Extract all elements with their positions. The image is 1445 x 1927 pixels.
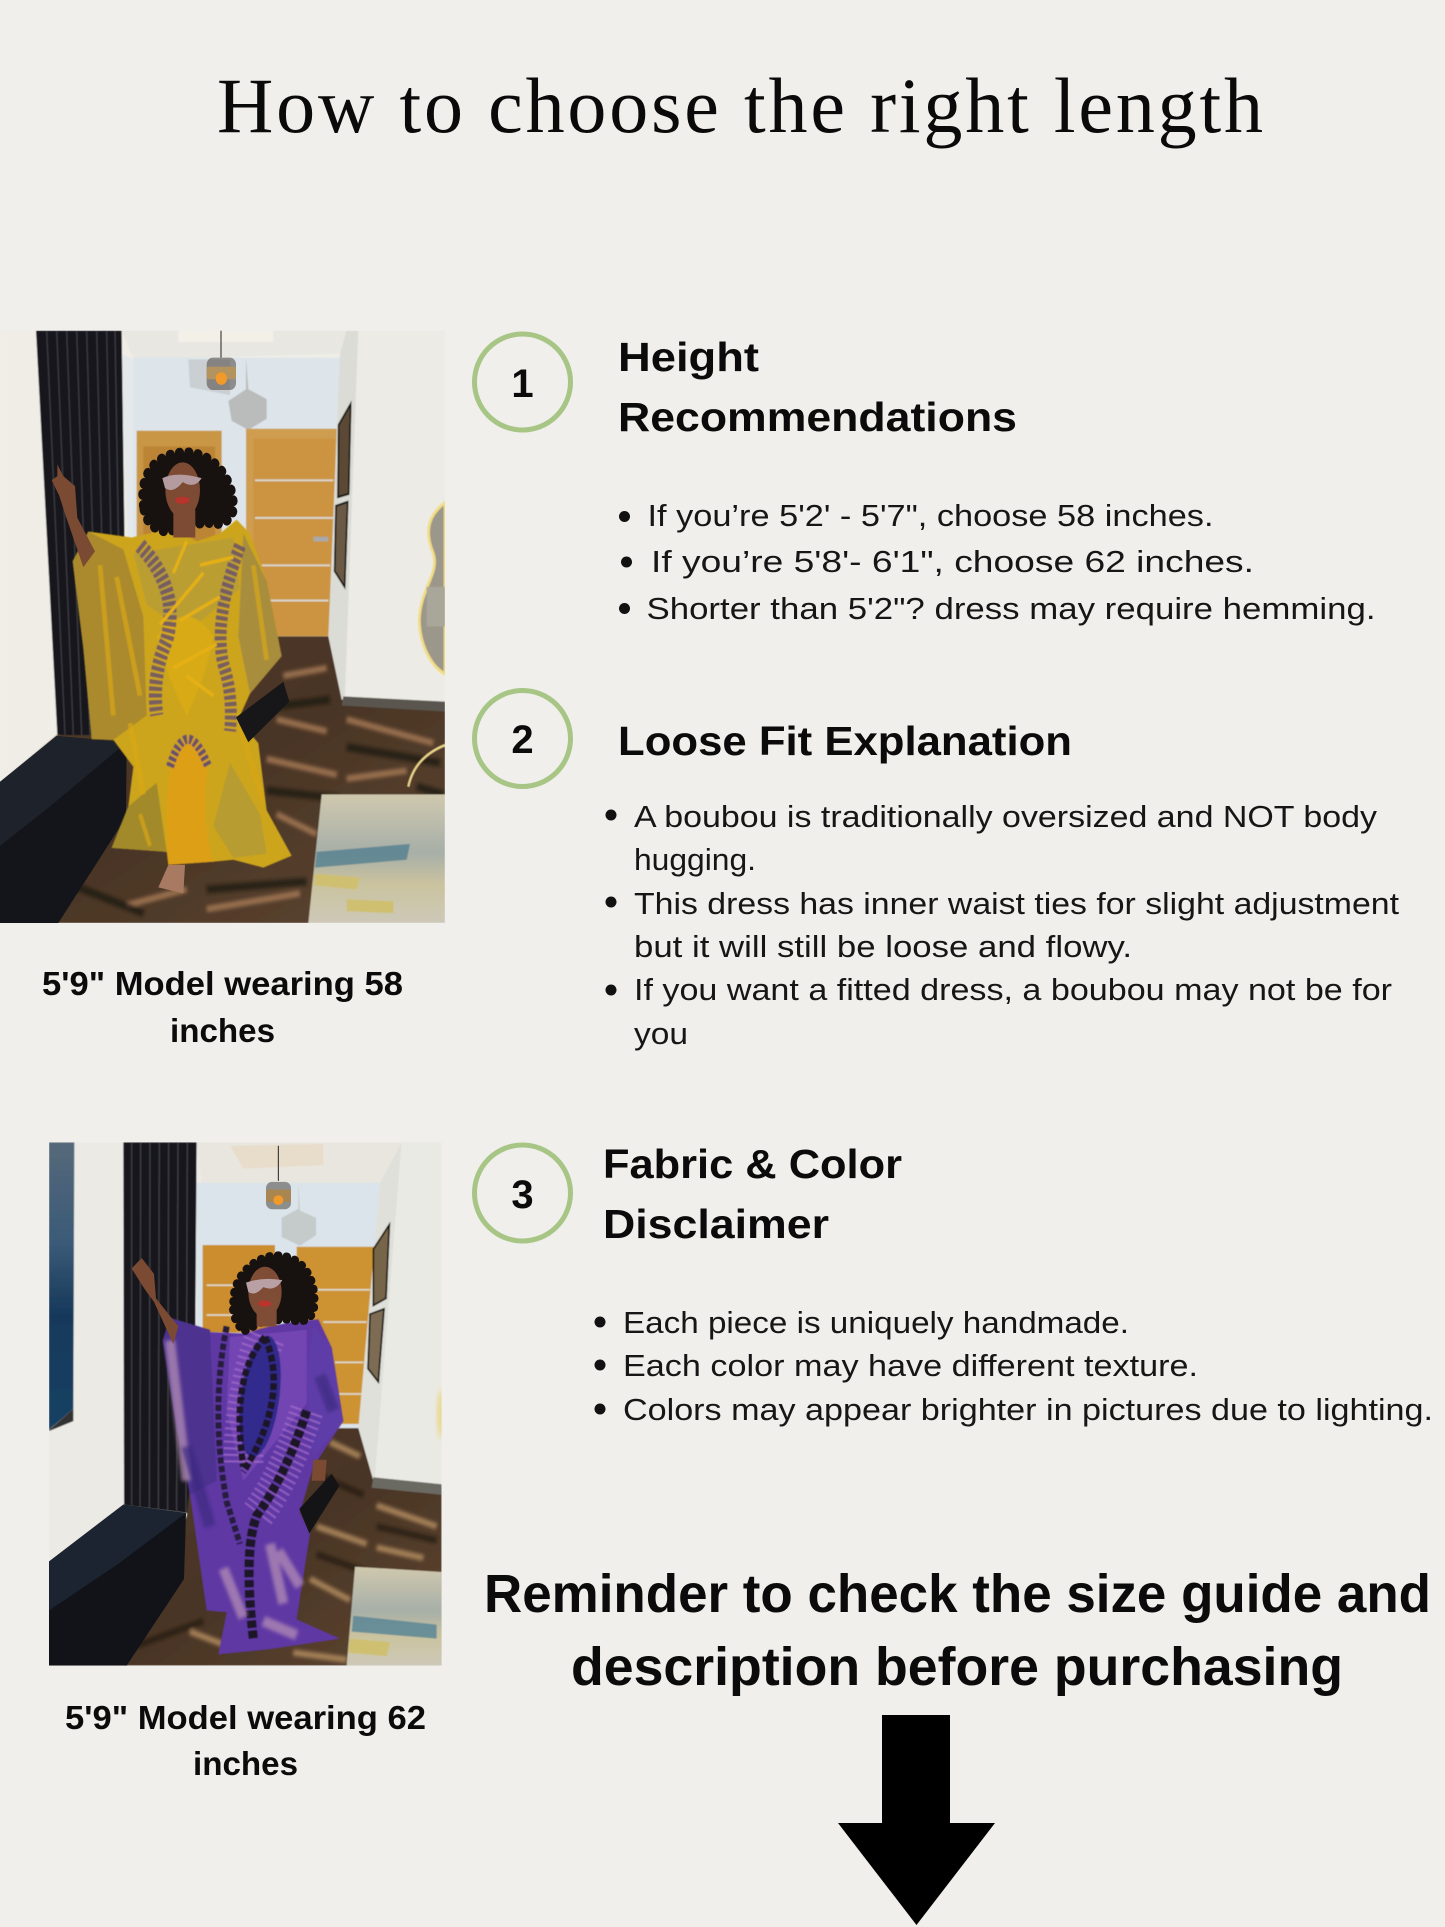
step 1 heading: [618, 334, 1017, 440]
step 2 bullet list: [606, 799, 1399, 1051]
step 1 bullet list: Shorter than 5'2"? dress may require hemming.: [646, 591, 1376, 626]
model figure: arm, hair and face: [132, 1256, 327, 1481]
step 1 bullet list: If you’re 5'2' - 5'7", choose 58 inches.: [648, 498, 1214, 533]
step 3 heading: [603, 1141, 902, 1247]
step 1 heading: Recommendations: [618, 394, 1017, 440]
step 2 bullet list: hugging.: [634, 842, 756, 877]
photo: model in yellow boubou: [0, 330, 445, 923]
step 2 number circle: 2: [511, 718, 534, 762]
step 2 bullet list: you: [634, 1016, 688, 1051]
step 2 heading: Loose Fit Explanation: [618, 718, 1072, 764]
yellow dress: [73, 520, 292, 868]
step 2 number circle: [474, 690, 570, 786]
step 1 number circle: 1: [511, 362, 534, 406]
step 2 bullet list: A boubou is traditionally oversized and NOT body: [634, 799, 1378, 834]
pendant lamp: [207, 331, 236, 390]
step 3 bullet list: Each piece is uniquely handmade.: [623, 1305, 1129, 1340]
step 3 heading: Fabric & Color: [603, 1141, 902, 1187]
caption: 58 inches: inches: [170, 1012, 275, 1049]
arrow pointing down: [838, 1715, 995, 1925]
caption: 58 inches: [42, 965, 403, 1049]
black clutch bag: [299, 1474, 339, 1533]
reminder callout: [484, 1564, 1431, 1697]
model figure: arm, hair, face and foot: [52, 452, 233, 893]
step 3 heading: Disclaimer: [603, 1201, 829, 1247]
caption: 62 inches: inches: [193, 1745, 298, 1782]
title: How to choose the right length: [217, 62, 1263, 149]
black bench: [49, 1505, 186, 1666]
photo: model in purple boubou: [49, 1142, 442, 1666]
reminder callout: description before purchasing: [571, 1637, 1343, 1697]
caption: 58 inches: 5'9" Model wearing 58: [42, 965, 403, 1002]
step 2 bullet list: but it will still be loose and flowy.: [634, 929, 1132, 964]
reminder callout: Reminder to check the size guide and: [484, 1564, 1431, 1624]
step 2 bullet list: If you want a fitted dress, a boubou may not be for: [634, 972, 1392, 1007]
step 1 bullet list: [619, 498, 1376, 626]
pendant lamp: [266, 1146, 291, 1209]
step 3 number circle: 3: [511, 1173, 534, 1217]
caption: 62 inches: [65, 1699, 426, 1782]
step 3 number circle: [474, 1145, 570, 1241]
black clutch bag: [236, 682, 289, 742]
black bench: [0, 736, 127, 923]
step 1 bullet list: If you’re 5'8'- 6'1", choose 62 inches.: [651, 544, 1254, 579]
step 2 bullet list: This dress has inner waist ties for slight adjustment: [634, 886, 1399, 921]
step 3 bullet list: Each color may have different texture.: [623, 1348, 1198, 1383]
step 1 heading: Height: [618, 334, 759, 380]
caption: 62 inches: 5'9" Model wearing 62: [65, 1699, 426, 1736]
step 3 bullet list: [594, 1305, 1433, 1427]
step 1 number circle: [474, 334, 570, 430]
purple dress: [163, 1318, 343, 1654]
step 3 bullet list: Colors may appear brighter in pictures due to lighting.: [623, 1392, 1433, 1427]
